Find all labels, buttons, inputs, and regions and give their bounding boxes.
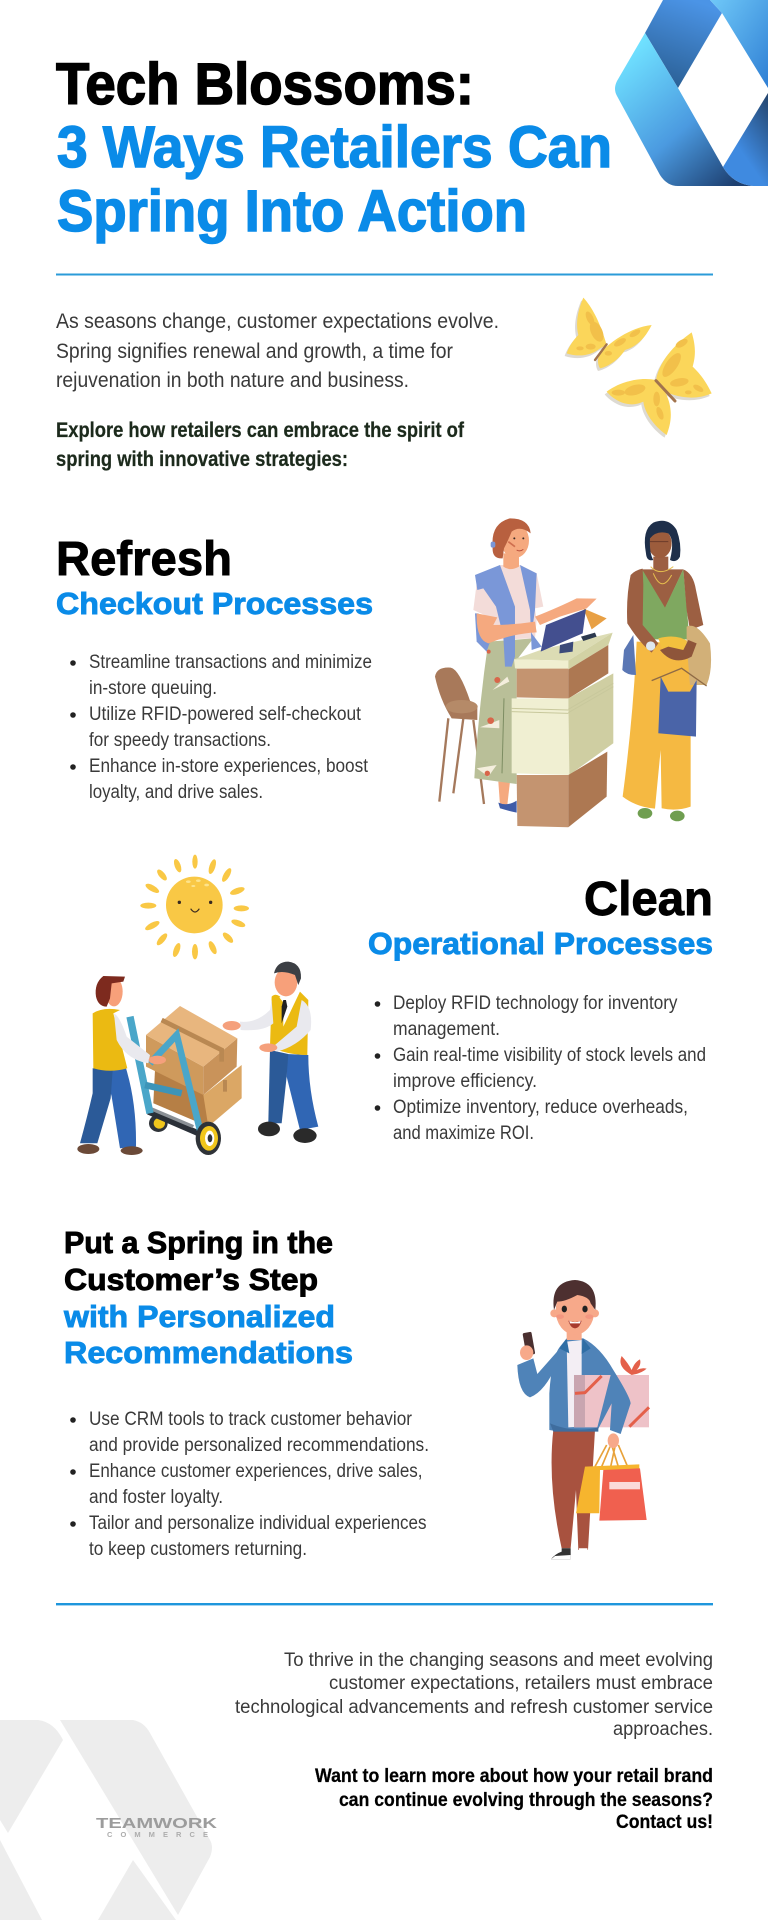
bullet list: operations: Optimize inventory, reduce overheads, <box>393 1097 688 1118</box>
bullet list: checkout: Utilize RFID-powered self-checkout <box>89 704 362 725</box>
bullet list: recommendations: Enhance customer experiences, drive sales, <box>89 1461 422 1482</box>
conclusion text: technological advancements and refresh customer service <box>235 1697 713 1718</box>
shopping bags <box>576 1433 647 1521</box>
bullet list: recommendations: and foster loyalty. <box>89 1487 223 1508</box>
explore callout text <box>56 419 465 471</box>
bullet list: checkout <box>70 652 372 803</box>
icon: smiling sun <box>140 855 249 959</box>
footer brand wordmark: TEAMWORK <box>96 1816 218 1832</box>
illustration: happy shopper with gift and bags <box>517 1280 649 1559</box>
heading: put a spring in the customer's step: with Personalized <box>63 1299 335 1334</box>
heading: clean: Clean <box>584 873 713 926</box>
bullet list: operations: Deploy RFID technology for inventory <box>393 993 678 1014</box>
title <box>56 52 612 244</box>
panel: clean operational processes <box>77 855 713 1155</box>
gift box <box>574 1356 649 1427</box>
panel: personalized recommendations <box>63 1225 649 1560</box>
intro text block: Spring signifies renewal and growth, a time for <box>56 340 453 363</box>
illustration: shop assistant and customer at counter <box>435 518 711 827</box>
intro text block: As seasons change, customer expectations evolve. <box>56 310 499 333</box>
bullet list: operations: Gain real-time visibility of stock levels and <box>393 1045 706 1066</box>
heading: refresh: Refresh <box>56 533 232 586</box>
assistant figure <box>473 518 607 813</box>
bullet list: operations: management. <box>393 1019 500 1040</box>
intro text block <box>56 310 499 392</box>
bullet list: checkout: for speedy transactions. <box>89 730 271 751</box>
customer figure <box>622 521 711 821</box>
bullet list: checkout: Enhance in-store experiences, boost <box>89 756 369 777</box>
conclusion text: To thrive in the changing seasons and meet evolving <box>284 1650 713 1671</box>
shopper body <box>517 1327 631 1559</box>
bullet list: recommendations <box>70 1409 429 1560</box>
bullet list: operations: improve efficiency. <box>393 1071 537 1092</box>
icon: top right brand logo <box>615 0 768 186</box>
checkout counter <box>512 609 613 827</box>
explore callout text: Explore how retailers can embrace the spirit of <box>56 419 465 442</box>
illustration: sun and workers moving boxes <box>77 855 318 1155</box>
call to action text <box>315 1766 713 1833</box>
bullet list: recommendations: Use CRM tools to track customer behavior <box>89 1409 413 1430</box>
explore callout text: spring with innovative strategies: <box>56 448 348 471</box>
heading: refresh <box>56 533 373 621</box>
icon: faded footer logo mark <box>0 1720 212 1920</box>
footer brand wordmark <box>96 1816 218 1839</box>
shopper head <box>550 1280 599 1335</box>
panel: refresh checkout processes <box>56 518 711 827</box>
heading: put a spring in the customer's step: Recommendations <box>64 1335 353 1370</box>
call to action text: Contact us! <box>616 1812 713 1833</box>
heading: clean <box>368 873 713 961</box>
call to action text: Want to learn more about how your retail brand <box>315 1766 713 1787</box>
heading: put a spring in the customer's step: Customer’s Step <box>64 1262 318 1297</box>
intro text block: rejuvenation in both nature and business. <box>56 369 409 392</box>
bullet list: operations <box>375 993 706 1144</box>
conclusion text <box>235 1650 713 1740</box>
right worker <box>223 962 318 1143</box>
stool <box>435 668 484 804</box>
heading: put a spring in the customer's step: Put a Spring in the <box>64 1225 333 1260</box>
left worker <box>77 976 143 1155</box>
bullet list: recommendations: and provide personalized recommendations. <box>89 1435 429 1456</box>
icon: yellow butterflies <box>565 298 712 438</box>
bullet list: checkout: Streamline transactions and minimize <box>89 652 372 673</box>
title: Tech Blossoms: <box>56 52 474 117</box>
heading: refresh: Checkout Processes <box>56 586 373 621</box>
stacked boxes on hand truck <box>114 1006 242 1155</box>
bullet list: checkout: in-store queuing. <box>89 678 217 699</box>
heading: put a spring in the customer's step <box>63 1225 353 1370</box>
conclusion text: approaches. <box>613 1719 713 1740</box>
call to action text: can continue evolving through the seasons? <box>339 1790 713 1811</box>
title: 3 Ways Retailers Can <box>57 115 612 180</box>
bullet list: recommendations: to keep customers returning. <box>89 1539 307 1560</box>
title: Spring Into Action <box>57 179 527 244</box>
bullet list: checkout: loyalty, and drive sales. <box>89 782 263 803</box>
bullet list: recommendations: Tailor and personalize individual experiences <box>89 1513 426 1534</box>
heading: clean: Operational Processes <box>368 926 713 961</box>
bullet list: operations: and maximize ROI. <box>393 1123 534 1144</box>
footer brand wordmark: COMMERCE <box>107 1830 208 1839</box>
conclusion text: customer expectations, retailers must embrace <box>329 1673 713 1694</box>
